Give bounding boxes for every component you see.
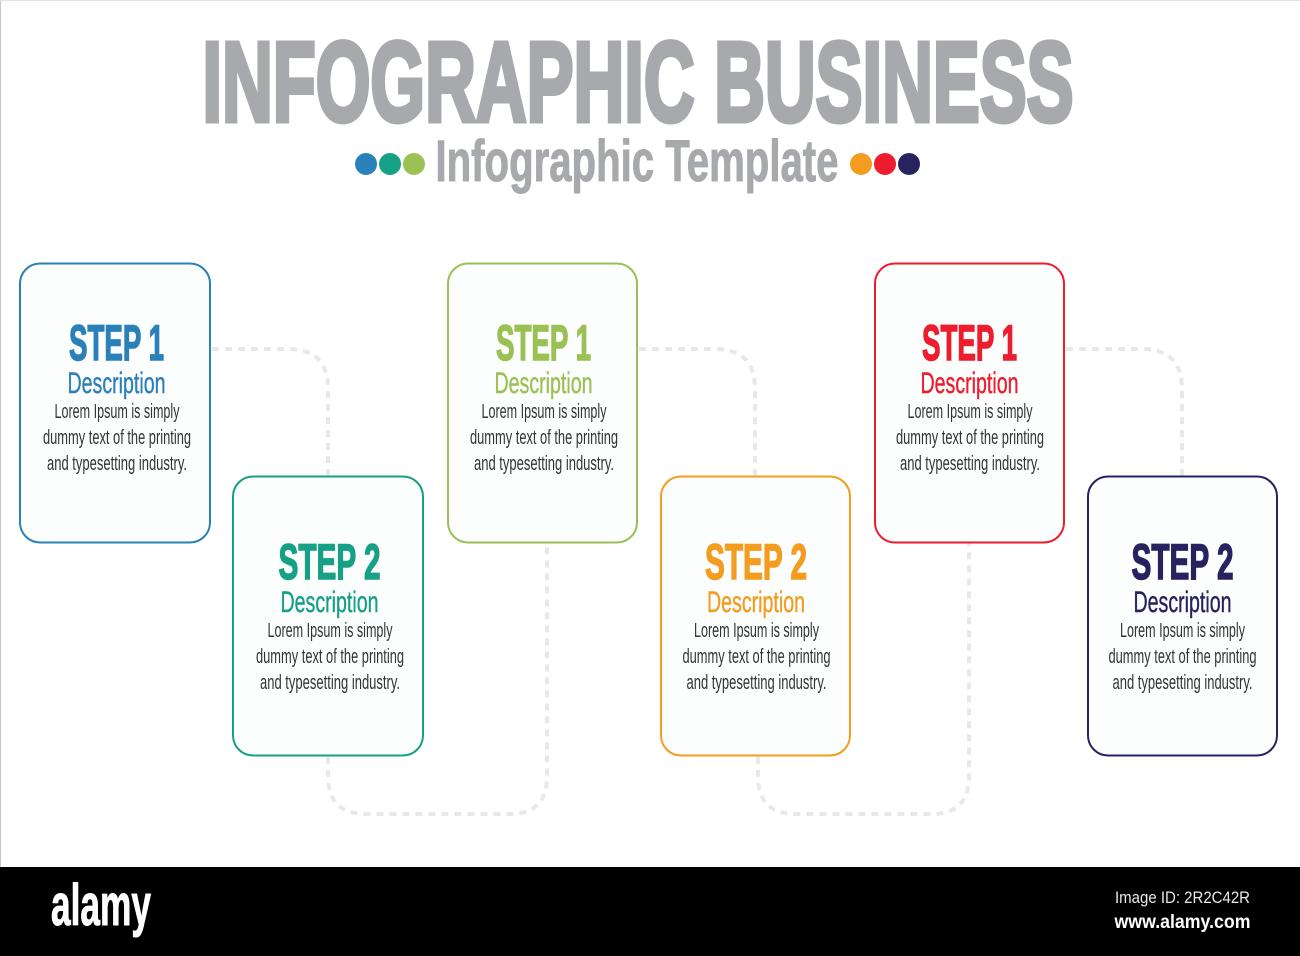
card: step 1 green: Lorem Ipsum is simply [482, 401, 606, 423]
card: step 1 green: and typesetting industry. [474, 453, 614, 475]
decorative dots left [355, 153, 425, 175]
card: step 1 red: Lorem Ipsum is simply [908, 401, 1032, 423]
card: step 1 green: dummy text of the printing [470, 427, 618, 449]
alamy logo: alamy [51, 873, 151, 938]
card: step 2 orange: dummy text of the printing [682, 646, 830, 668]
card: step 1 red: STEP 1 [922, 315, 1017, 371]
card: step 2 navy [1088, 476, 1277, 756]
card: step 2 teal: STEP 2 [278, 534, 380, 590]
card: step 1 blue: Description [68, 367, 166, 400]
card: step 1 green: Description [494, 367, 592, 400]
card: step 1 red: Description [920, 367, 1018, 400]
card: step 1 green [448, 264, 637, 542]
card: step 1 blue: Lorem Ipsum is simply [54, 401, 180, 423]
card: step 1 blue: and typesetting industry. [47, 453, 187, 475]
decorative dots right [850, 153, 920, 175]
image id: Image ID: 2R2C42R [1115, 888, 1250, 907]
card: step 1 red [875, 264, 1064, 542]
card: step 2 teal [233, 476, 423, 756]
website: www.alamy.com [1114, 912, 1250, 933]
card: step 2 teal: Description [280, 586, 378, 619]
footer bar [0, 867, 1300, 956]
card: step 2 navy: Description [1134, 586, 1232, 619]
card: step 2 teal: Lorem Ipsum is simply [268, 620, 392, 642]
card: step 2 orange: Lorem Ipsum is simply [694, 620, 819, 642]
card: step 1 red: dummy text of the printing [896, 427, 1044, 449]
card: step 2 orange: Description [707, 586, 805, 619]
card: step 1 red: and typesetting industry. [900, 453, 1040, 475]
card: step 1 blue [20, 264, 210, 542]
card: step 1 blue: STEP 1 [69, 315, 164, 371]
card: step 2 orange: STEP 2 [705, 534, 807, 590]
card: step 1 blue: dummy text of the printing [43, 427, 191, 449]
card: step 2 teal: and typesetting industry. [260, 672, 400, 694]
card: step 2 teal: dummy text of the printing [256, 646, 404, 668]
card: step 1 green: STEP 1 [496, 315, 591, 371]
card: step 2 orange: and typesetting industry. [686, 672, 826, 694]
card: step 2 orange [661, 476, 850, 756]
subtitle: Infographic Template [436, 129, 838, 194]
card: step 2 navy: STEP 2 [1132, 534, 1234, 590]
dotted connector path [212, 349, 1182, 814]
